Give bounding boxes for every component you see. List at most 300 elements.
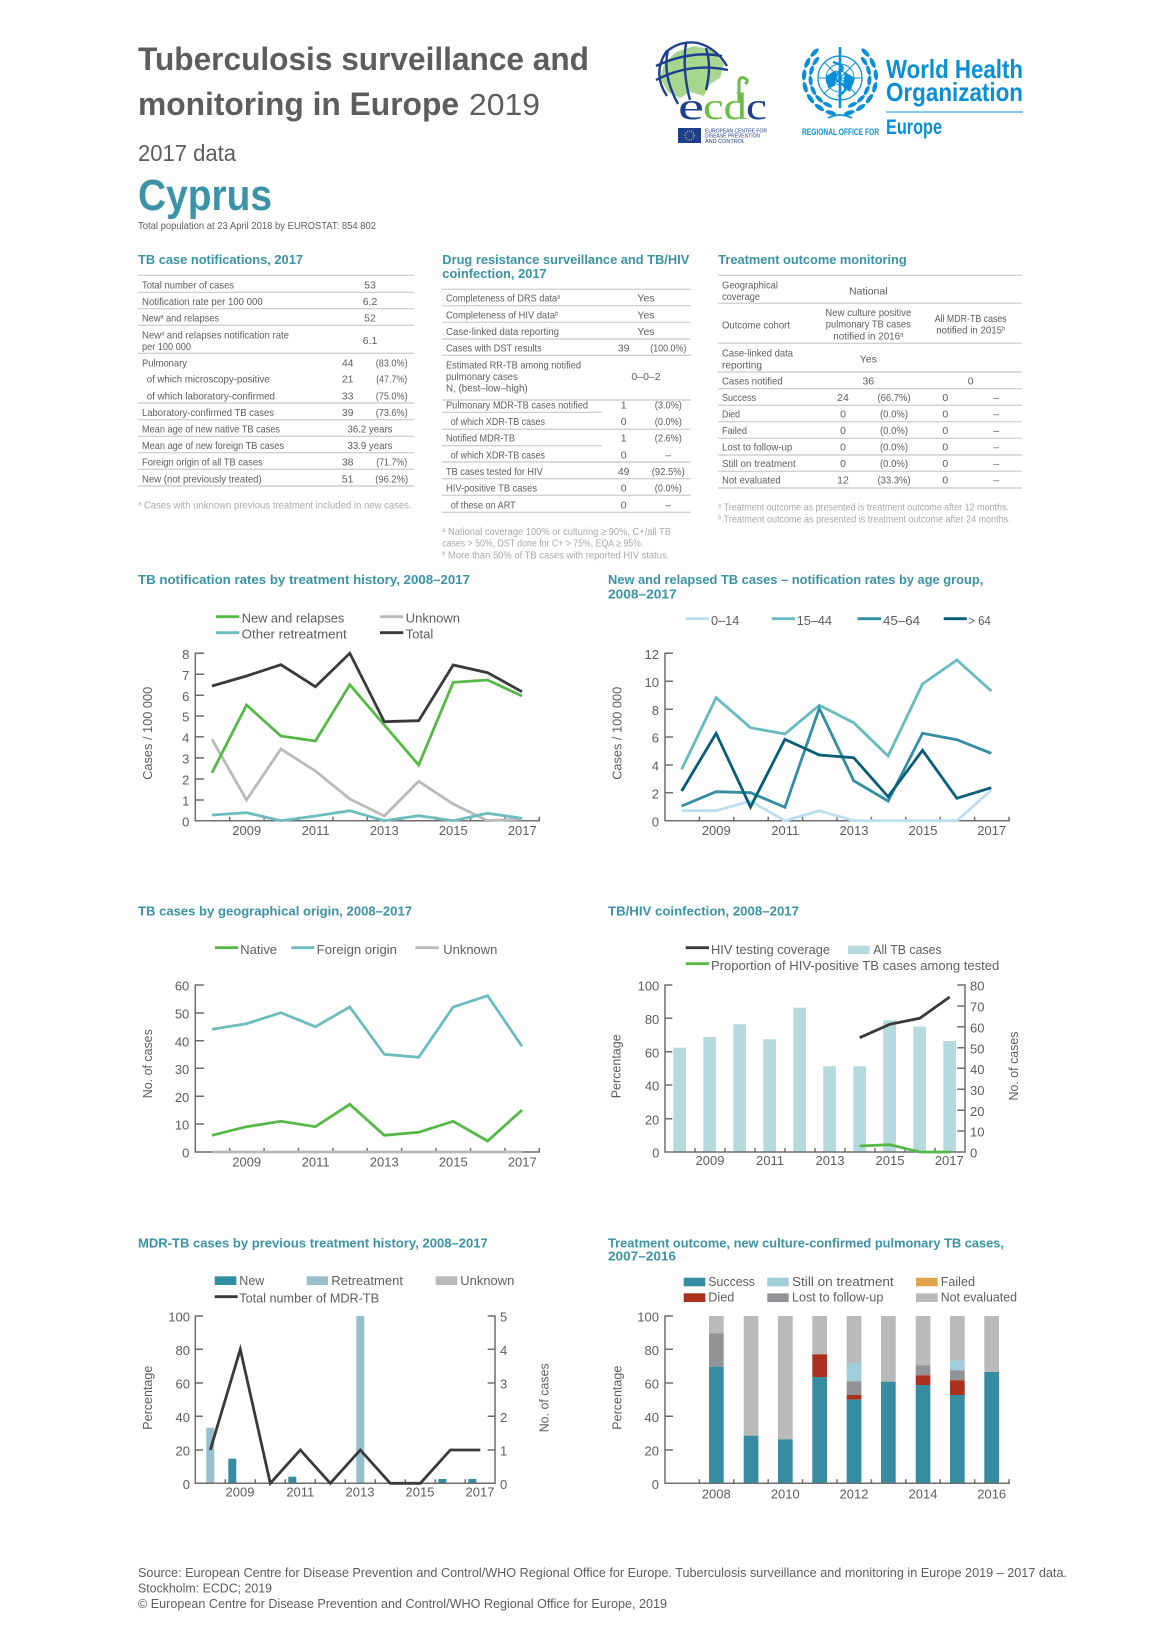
axis labels: 12 (645, 647, 659, 662)
table rows: 1 (621, 399, 627, 411)
chart panel: TB notification rates by treatment history (138, 572, 539, 838)
table rows: (71.7%) (376, 457, 407, 469)
footnote: a (138, 502, 142, 508)
table rows: of these on ART (451, 499, 516, 511)
table rows: of which microscopy-positive (147, 374, 270, 386)
table rows: Mean age of new native TB cases (142, 424, 280, 436)
heading: TB cases by geographical origin, 2008–2017 (138, 904, 412, 919)
table rows: New (not previously treated) (142, 473, 262, 485)
table rows: Success (722, 392, 756, 404)
table rows: Notification rate per 100 000 (142, 296, 263, 308)
table rows: HIV-positive TB cases (446, 483, 537, 495)
axis labels: 2012 (840, 1486, 868, 1501)
legend: Total (406, 626, 433, 641)
logo: ECDC: c (746, 86, 767, 128)
table rows: 36.2 years (348, 424, 392, 436)
table rows: (47.7%) (376, 374, 407, 386)
axis labels: 2013 (370, 1155, 399, 1170)
table rows: National (849, 285, 888, 297)
table rows: (92.5%) (652, 466, 685, 478)
axis labels: 2015 (909, 823, 937, 838)
legend: HIV testing coverage (711, 942, 830, 957)
footnotes: National coverage 100% or culturing ≥ 90%, C+/all TB (445, 527, 671, 538)
table rows: (2.6%) (655, 433, 682, 445)
table rows: (0.0%) (880, 442, 908, 454)
table rows: 21 (342, 374, 354, 386)
table rows: and relapses notification rate (164, 329, 289, 341)
legend (216, 611, 460, 641)
table rows: 0 (942, 392, 948, 404)
title: monitoring in Europe (138, 86, 459, 122)
logo: ECDC: cd (703, 86, 747, 128)
axis labels: 10 (970, 1125, 984, 1140)
table rows: – (665, 499, 671, 511)
footnotes: b (442, 551, 446, 557)
table rows: 0 (942, 475, 948, 487)
table rows: per 100 000 (142, 341, 191, 353)
logo: WHO Europe (801, 47, 1023, 139)
logo: ECDC: AND CONTROL (705, 139, 745, 145)
axis labels: 2017 (466, 1485, 494, 1500)
table rows: a (900, 332, 904, 338)
axis labels: 2011 (286, 1485, 314, 1500)
axis labels: 20 (970, 1104, 984, 1119)
axis labels: 2011 (302, 1155, 330, 1170)
axis labels: 2 (182, 773, 189, 788)
table rows: Yes (637, 293, 655, 305)
axis labels: 20 (645, 1444, 659, 1459)
table rows (142, 279, 408, 485)
axis labels: 2016 (977, 1486, 1006, 1501)
table rows: (83.0%) (376, 358, 408, 370)
axis labels: 2011 (756, 1153, 784, 1168)
axis labels: 30 (175, 1062, 189, 1077)
table rows: 0 (621, 483, 627, 495)
logo: WHO Europe: Organization (886, 77, 1023, 107)
axis labels: 2013 (346, 1485, 374, 1500)
table rows: 0 (621, 449, 627, 461)
axis labels: 40 (176, 1410, 190, 1425)
table rows: 6.2 (363, 296, 377, 308)
line series (212, 996, 522, 1152)
table rows: notified in 2016 (833, 330, 905, 342)
legend (215, 942, 497, 957)
logo: ECDC: e (678, 86, 704, 128)
heading: TB case notifications: TB case notifications, 2017 (138, 252, 303, 267)
axis labels: 5 (500, 1310, 507, 1325)
axis labels: 1 (182, 794, 189, 809)
axis labels (140, 647, 537, 838)
axis labels: Percentage (610, 1366, 625, 1430)
heading: 2008–2017 (608, 587, 677, 602)
axis labels: 2008 (702, 1486, 731, 1501)
legend: Unknown (460, 1273, 514, 1288)
table rows: – (993, 392, 999, 404)
logo: WHO Europe: REGIONAL OFFICE FOR (802, 127, 879, 137)
axis labels: 0 (652, 1477, 659, 1492)
footnotes: More than 50% of TB cases with reported HIV status. (445, 550, 669, 561)
line series (212, 653, 522, 821)
axis labels: 100 (638, 979, 659, 994)
axis labels: 2011 (302, 823, 330, 838)
legend: Not evaluated (941, 1290, 1017, 1305)
axis labels: 8 (182, 647, 189, 662)
table rows: (0.0%) (880, 458, 908, 470)
table rows: pulmonary cases (446, 371, 518, 383)
table rows: and relapses (163, 313, 219, 325)
source footer: © European Centre for Disease Prevention and Control/WHO Regional Office for Europe, 2019 (138, 1597, 667, 1611)
axis labels: 40 (645, 1410, 659, 1425)
legend (686, 942, 999, 973)
stacked bars (709, 1316, 999, 1483)
footnotes: b (718, 515, 722, 521)
table rows: 53 (364, 279, 376, 291)
table rows (446, 293, 686, 511)
table rows: – (993, 458, 999, 470)
heading: TB notification rates by treatment history, 2008–2017 (138, 572, 470, 587)
table rows: (75.0%) (376, 390, 408, 402)
table rows: (96.2%) (375, 473, 408, 485)
table rows: Laboratory-confirmed TB cases (142, 407, 274, 419)
axis labels: 2009 (226, 1485, 254, 1500)
legend (684, 1274, 1017, 1305)
table rows: (33.3%) (878, 475, 910, 487)
axis labels (610, 647, 1006, 838)
axis labels: Percentage (140, 1366, 155, 1430)
axis labels: 20 (176, 1444, 190, 1459)
panel: TB case notifications (138, 252, 414, 512)
axis labels: 50 (175, 1007, 189, 1022)
bars: all TB cases (673, 1008, 956, 1152)
table rows: (73.6%) (376, 407, 408, 419)
axis labels: 2015 (439, 823, 468, 838)
table rows: 0 (621, 499, 627, 511)
axis labels: 70 (970, 1000, 984, 1015)
table rows: Yes (637, 309, 655, 321)
axis labels: 6 (652, 731, 659, 746)
axis labels: 2013 (816, 1153, 844, 1168)
table rows: 12 (837, 475, 849, 487)
axis labels: Percentage (609, 1034, 624, 1098)
axis labels: 2013 (370, 823, 399, 838)
logo: ECDC (656, 42, 767, 145)
axis labels: 60 (176, 1377, 190, 1392)
table rows: 0 (942, 458, 948, 470)
axis labels (140, 979, 537, 1170)
table rows: (100.0%) (650, 343, 686, 355)
legend: Proportion of HIV-positive TB cases among tested (711, 958, 999, 973)
axis labels: 2009 (232, 823, 261, 838)
table rows: coverage (722, 291, 760, 303)
axis labels: 0 (182, 1146, 189, 1161)
table rows: Cases with DST results (446, 343, 542, 355)
legend: Unknown (443, 942, 497, 957)
axis labels: No. of cases (537, 1363, 552, 1432)
axis labels: 2017 (977, 823, 1006, 838)
table rows: Cases notified (722, 375, 783, 387)
axis labels (140, 1310, 552, 1500)
table rows: 6.1 (363, 335, 377, 347)
line series (860, 997, 950, 1152)
axis labels: 2015 (439, 1155, 468, 1170)
population note: Total population at 23 April 2018 by EUROSTAT: 854 802 (138, 220, 376, 232)
table rows: 0 (840, 425, 846, 437)
table rows: (66.7%) (878, 392, 910, 404)
table rows: – (993, 425, 999, 437)
axis labels: 20 (175, 1090, 189, 1105)
table rows: 0 (840, 408, 846, 420)
table rows: Outcome cohort (722, 319, 790, 331)
axis labels: 80 (645, 1343, 659, 1358)
table rows: 44 (342, 358, 354, 370)
footnotes (442, 527, 671, 561)
table rows: – (993, 475, 999, 487)
axis labels: 100 (168, 1310, 190, 1325)
table rows: 0 (621, 416, 627, 428)
axis labels: 2009 (232, 1155, 261, 1170)
table rows: Foreign origin of all TB cases (142, 457, 263, 469)
axis labels: 4 (182, 731, 189, 746)
legend: Failed (941, 1274, 975, 1289)
table rows: 38 (342, 457, 354, 469)
heading: 2007–2016 (608, 1249, 676, 1264)
legend (686, 613, 991, 628)
table rows: b (1002, 327, 1006, 333)
table rows (722, 279, 1007, 487)
table rows: of which XDR-TB cases (451, 449, 545, 461)
axis labels: 20 (645, 1112, 659, 1127)
axis labels: 0 (652, 1146, 659, 1161)
axis labels: 5 (182, 710, 189, 725)
axis labels: Cases / 100 000 (140, 687, 155, 780)
table rows: a (161, 315, 164, 321)
legend: Unknown (406, 611, 460, 626)
table rows: – (993, 408, 999, 420)
axis labels: 2 (652, 786, 659, 801)
table rows: TB cases tested for HIV (446, 466, 543, 478)
table rows: (3.0%) (655, 399, 682, 411)
table rows: 1 (621, 433, 627, 445)
legend: Retreatment (331, 1273, 403, 1288)
table rows: Pulmonary (142, 358, 188, 370)
heading: drug resistance (442, 252, 690, 281)
axis labels: 0 (182, 814, 189, 829)
axis labels: 60 (970, 1020, 984, 1035)
axis labels: 60 (175, 979, 189, 994)
table rows: New (142, 329, 163, 341)
legend: New and relapses (242, 611, 345, 626)
axis labels: 50 (970, 1041, 984, 1056)
table rows: Completeness of HIV data (446, 309, 569, 321)
footnotes: a (442, 528, 446, 534)
axis labels: 2013 (840, 823, 868, 838)
table rows: Still on treatment (722, 458, 796, 470)
footnotes: a (718, 504, 722, 510)
chart panel: MDR-TB cases by previous treatment history (138, 1235, 552, 1500)
table rows: 39 (342, 407, 354, 419)
axis labels: 2010 (771, 1486, 800, 1501)
axis labels: 60 (645, 1377, 659, 1392)
table rows: 49 (618, 466, 630, 478)
axis labels (609, 979, 1021, 1168)
bars (206, 1316, 476, 1483)
axis labels: 40 (645, 1079, 659, 1094)
table rows: 0 (942, 425, 948, 437)
table rows: – (993, 442, 999, 454)
table rows: Total number of cases (142, 279, 234, 291)
line series (682, 660, 991, 821)
title: 2019 (469, 87, 540, 122)
axis labels: 0 (183, 1477, 190, 1492)
table rows: Died (722, 408, 740, 420)
table rows: Pulmonary MDR-TB cases notified (446, 399, 588, 411)
axis labels: 3 (182, 752, 189, 767)
table rows: 36 (862, 375, 874, 387)
axis labels: Cases / 100 000 (610, 687, 625, 780)
axis labels: 100 (637, 1310, 659, 1325)
axis labels: 40 (970, 1062, 984, 1077)
axis labels: 6 (182, 689, 189, 704)
table rows: Notified MDR-TB (446, 433, 515, 445)
axis labels: 80 (176, 1343, 190, 1358)
axis labels: 80 (645, 1012, 659, 1027)
table rows: N, (best–low–high) (446, 383, 528, 395)
title: Tuberculosis surveillance and (138, 41, 589, 77)
legend: > 64 (968, 613, 991, 628)
table rows: Estimated RR-TB among notified (446, 359, 581, 371)
axis labels: 40 (175, 1034, 189, 1049)
axis labels: 2015 (406, 1485, 434, 1500)
axis labels: 8 (652, 703, 659, 718)
table rows: b (555, 311, 559, 317)
axis labels: 4 (500, 1343, 507, 1358)
table rows: 33.9 years (348, 440, 392, 452)
axis labels: 2 (500, 1410, 507, 1425)
footnotes: Treatment outcome as presented is treatment outcome after 24 months. (721, 514, 1011, 525)
axis labels: 30 (970, 1083, 984, 1098)
subtitle: 2017 data: 2017 data (138, 140, 236, 166)
axis labels: 2017 (508, 823, 537, 838)
logo: WHO Europe: World Health (886, 54, 1023, 84)
table rows: New culture positive (825, 307, 911, 319)
heading: New and relapsed TB cases – notification rates by age group, (608, 572, 983, 587)
table rows: 51 (342, 473, 354, 485)
heading: MDR-TB cases by previous treatment history, 2008–2017 (138, 1235, 488, 1250)
axis labels: 3 (500, 1377, 507, 1392)
axis labels: 80 (970, 979, 984, 994)
table rows: Not evaluated (722, 475, 781, 487)
chart panel: treatment outcome (608, 1235, 1017, 1501)
heading: treatment outcome monitoring: Treatment outcome monitoring (718, 252, 907, 267)
table rows: 0 (968, 375, 974, 387)
table rows: 0 (942, 408, 948, 420)
table rows: 39 (618, 343, 630, 355)
chart panel: TB cases by geographical origin (138, 904, 539, 1170)
axis labels: 10 (645, 675, 659, 690)
source footer: Source: European Centre for Disease Prevention and Control/WHO Regional Office for Europe. Tuberculosis surveillance and monitoring in Europe 2019 – 2017 data. (138, 1566, 1067, 1580)
axis labels: 2009 (702, 823, 731, 838)
table rows: New (142, 313, 163, 325)
legend: Died (708, 1290, 734, 1305)
table rows: Case-linked data (722, 348, 793, 360)
table rows: (0.0%) (655, 416, 682, 428)
table rows: – (665, 449, 671, 461)
legend: Total number of MDR-TB (239, 1291, 379, 1306)
axis labels: 2009 (696, 1153, 724, 1168)
country name: Cyprus (138, 171, 272, 220)
chart panel: TB/HIV coinfection (608, 904, 1021, 1168)
table rows: Geographical (722, 279, 778, 291)
footnotes: cases > 50%, DST done for C+ > 75%, EQA ≥ 95%. (442, 539, 643, 550)
axis labels: No. of cases (1006, 1031, 1021, 1100)
chart panel: notification rates by age group (608, 572, 1009, 838)
table rows: (0.0%) (880, 425, 908, 437)
footnote: Cases with unknown previous treatment included in new cases. (141, 501, 412, 512)
table rows: 0 (840, 442, 846, 454)
legend: 0–14 (711, 613, 739, 628)
axis labels: 2011 (771, 823, 799, 838)
table rows: Mean age of new foreign TB cases (142, 440, 284, 452)
table rows: 24 (837, 392, 849, 404)
table rows: a (161, 331, 165, 337)
table rows: Yes (637, 326, 655, 338)
source footer: Stockholm: ECDC; 2019 (138, 1582, 272, 1596)
table rows: (0.0%) (655, 483, 682, 495)
heading (608, 572, 983, 602)
footnotes (718, 503, 1011, 525)
legend: Success (708, 1274, 755, 1289)
table rows: 52 (364, 313, 376, 325)
axis labels: 4 (652, 759, 659, 774)
table rows: a (557, 295, 561, 301)
logo: ECDC: EUROPEAN CENTRE FOR (705, 128, 767, 134)
panel: treatment outcome monitoring (718, 252, 1022, 525)
table rows: (0.0%) (880, 408, 908, 420)
table rows: Lost to follow-up (722, 442, 792, 454)
axis labels: 1 (500, 1444, 507, 1459)
legend: Lost to follow-up (792, 1290, 883, 1305)
table rows: of which XDR-TB cases (451, 416, 545, 428)
logo: WHO Europe: Europe (886, 116, 942, 139)
legend: Still on treatment (792, 1274, 894, 1289)
table rows: Failed (722, 425, 747, 437)
table rows: notified in 2015 (936, 325, 1007, 337)
legend: 15–44 (797, 613, 832, 628)
table rows: Yes (860, 353, 877, 365)
line: total MDR-TB (210, 1349, 480, 1483)
axis labels: 60 (645, 1045, 659, 1060)
heading: Treatment outcome, new culture-confirmed pulmonary TB cases, (608, 1235, 1004, 1250)
axis labels: 0 (652, 814, 659, 829)
logo: ECDC: DISEASE PREVENTION (705, 134, 760, 140)
table rows: 0 (840, 458, 846, 470)
heading: TB/HIV coinfection, 2008–2017 (608, 904, 799, 919)
table rows: reporting (722, 359, 762, 371)
table rows: Case-linked data reporting (446, 326, 559, 338)
table rows: of which laboratory-confirmed (147, 390, 275, 402)
legend: All TB cases (873, 942, 942, 957)
table rows: Completeness of DRS data (446, 293, 573, 305)
axis labels: 10 (175, 1118, 189, 1133)
heading: drug resistance: Drug resistance surveillance and TB/HIV (442, 252, 690, 267)
axis labels: 2017 (508, 1155, 537, 1170)
table rows: All MDR-TB cases (935, 313, 1007, 325)
legend: Other retreatment (242, 626, 347, 641)
axis labels: No. of cases (140, 1029, 155, 1098)
legend: Native (240, 942, 277, 957)
panel: drug resistance surveillance (442, 252, 691, 561)
title (138, 41, 589, 122)
